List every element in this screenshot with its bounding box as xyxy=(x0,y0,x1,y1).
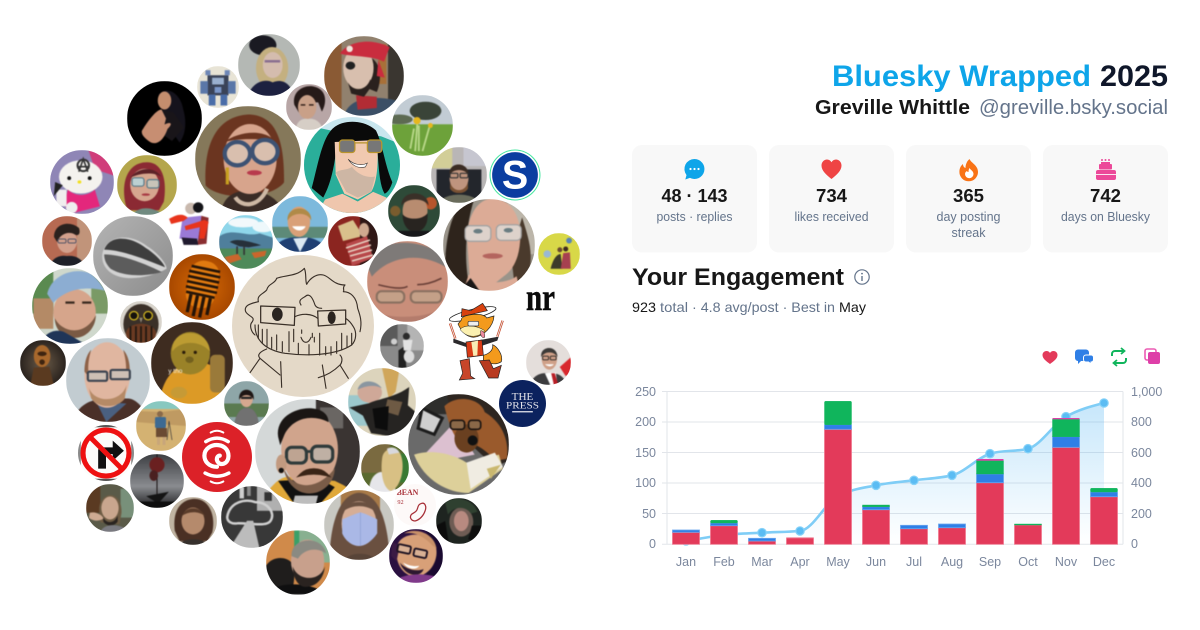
avatar: y tho baby painting: y tho xyxy=(168,368,183,375)
avatar: man on a train xyxy=(431,147,487,203)
avatar: The Press logo xyxy=(499,380,546,427)
profile name and handle xyxy=(815,97,1168,119)
avatar: woman wearing blue face mask xyxy=(324,490,394,560)
panel: avatar bubble cluster xyxy=(20,34,580,595)
left axis labels: 250 xyxy=(635,385,656,399)
panel: days on Bluesky stat: days on Bluesky xyxy=(1061,209,1150,224)
left axis labels xyxy=(635,385,656,551)
avatar: no right turn sign xyxy=(78,425,134,481)
engagement summary: · 4.8 avg/post · Best in xyxy=(692,299,835,315)
panel: likes received stat: 734 xyxy=(816,186,847,206)
profile name and handle: @greville.bsky.social xyxy=(979,97,1168,119)
avatar: cowboy fox cartoon xyxy=(445,300,509,382)
avatar: dog wearing glasses with a book xyxy=(408,394,509,495)
avatar: main man with glasses and moustache xyxy=(255,399,360,504)
icon: replies xyxy=(1075,350,1094,364)
avatar: bearded man, painted backdrop xyxy=(388,185,440,237)
avatar: grey-haired man looking down xyxy=(367,241,448,322)
avatar: glittery face in dark xyxy=(436,498,482,544)
right axis labels: 800 xyxy=(1131,415,1152,429)
title: 2025 xyxy=(1100,60,1168,93)
left axis labels: 150 xyxy=(635,446,656,460)
month labels: Nov xyxy=(1055,555,1078,569)
avatar: black and white seed xyxy=(93,216,173,296)
avatar: blonde woman from behind xyxy=(361,444,409,492)
icon: reposts xyxy=(1112,348,1126,366)
right axis labels: 1,000 xyxy=(1131,385,1162,399)
panel: likes received stat: likes received xyxy=(794,209,868,224)
avatar: purple-tinted man with glasses xyxy=(389,529,443,583)
title: Bluesky Wrapped xyxy=(832,60,1091,93)
icon: info xyxy=(855,270,869,284)
engagement summary: total xyxy=(660,299,688,315)
avatar: Bean 92 logo: BEAN xyxy=(397,488,418,497)
avatar: man with beard, bottom of cluster xyxy=(266,530,330,595)
avatar: robot illustration xyxy=(197,66,239,108)
avatar: smiling woman in glasses xyxy=(443,199,535,291)
left axis labels: 0 xyxy=(649,537,656,551)
icon: heart xyxy=(822,160,842,179)
icon: cake xyxy=(1096,159,1116,180)
panel: day posting streak stat xyxy=(906,145,1031,252)
avatar: woman with dark curled hair xyxy=(169,497,217,545)
avatar: kilted hiker in field xyxy=(136,401,186,451)
engagement summary: 923 xyxy=(632,299,656,315)
panel: day posting streak stat: streak xyxy=(952,225,986,240)
avatar: Bean 92 logo xyxy=(394,484,436,526)
avatar: cartoon Kronk with sunglasses xyxy=(304,117,400,213)
left axis labels: 100 xyxy=(635,476,656,490)
month labels: Aug xyxy=(941,555,963,569)
avatar: woman with round blue glasses xyxy=(195,106,301,212)
avatar: owl xyxy=(120,301,162,343)
month labels: Jun xyxy=(866,555,886,569)
engagement summary xyxy=(632,299,866,315)
right axis labels: 600 xyxy=(1131,446,1152,460)
avatar: hello kitty plush xyxy=(50,150,114,214)
avatar: yellow illustrated badge xyxy=(538,233,580,275)
avatar: pirate with red bandana xyxy=(324,36,404,116)
avatar: hand-drawn sketch with glasses xyxy=(232,255,374,397)
avatar: black and white abstract illustration xyxy=(221,486,283,548)
avatar: bald man with glasses xyxy=(66,338,150,422)
avatar: man in red-striped tie xyxy=(526,340,571,385)
cumulative points xyxy=(682,399,1108,545)
icon: quotes xyxy=(1145,349,1160,364)
avatar: bird over mountain landscape xyxy=(219,215,273,269)
profile name and handle: Greville Whittle xyxy=(815,97,970,119)
avatar: dark tree photo xyxy=(130,454,184,508)
right axis labels: 0 xyxy=(1131,537,1138,551)
heading: Your Engagement: Your Engagement xyxy=(632,264,844,291)
avatar: daffodils in field xyxy=(392,95,453,156)
panel: posts and replies stat xyxy=(632,145,757,252)
avatar: hug illustration xyxy=(168,202,210,246)
avatar: orange microphone xyxy=(169,254,235,320)
avatar: illustrated woman on black xyxy=(127,81,202,156)
chart: monthly engagement stacked bars with cumulative line xyxy=(635,385,1162,569)
month labels: Oct xyxy=(1018,555,1038,569)
icon: flame xyxy=(959,159,978,181)
right axis labels: 200 xyxy=(1131,507,1152,521)
panel: posts and replies stat: 48 · 143 xyxy=(662,186,728,206)
month labels: Jan xyxy=(676,555,696,569)
panel: likes received stat xyxy=(769,145,894,252)
panel: days on Bluesky stat xyxy=(1043,145,1168,252)
avatar: man in blue suit xyxy=(272,196,328,252)
avatar: woman with dark cat xyxy=(348,368,416,436)
avatar: woman in checked dress xyxy=(224,381,269,426)
month labels xyxy=(676,555,1115,569)
month labels: Feb xyxy=(713,555,735,569)
left axis labels: 50 xyxy=(642,507,656,521)
avatar: blue S logo xyxy=(489,149,541,201)
icon: speech bubble xyxy=(684,159,704,180)
month labels: Apr xyxy=(790,555,810,569)
month labels: Jul xyxy=(906,555,922,569)
month labels: May xyxy=(826,555,851,569)
avatar: y tho baby painting xyxy=(151,322,233,404)
month labels: Sep xyxy=(979,555,1001,569)
avatar: woman with red hair and glasses xyxy=(117,155,177,215)
avatar: red and striped vintage photo xyxy=(328,216,378,266)
avatar: red spiral logo xyxy=(182,422,252,492)
cumulative line xyxy=(686,403,1104,541)
avatar: black and white group photo xyxy=(380,324,424,368)
avatar: woman with veil xyxy=(238,34,300,96)
month labels: Dec xyxy=(1093,555,1115,569)
icon: like xyxy=(1042,351,1058,364)
panel: days on Bluesky stat: 742 xyxy=(1090,186,1121,206)
avatar: man with long hair, hand on cheek xyxy=(86,484,134,532)
right axis labels: 400 xyxy=(1131,476,1152,490)
avatar: The Press logo: THE xyxy=(512,392,533,403)
avatar: Bean 92 logo: 92 xyxy=(397,499,404,506)
right axis labels xyxy=(1131,385,1162,551)
avatar: blue S logo: S xyxy=(502,154,528,198)
cumulative area xyxy=(686,403,1104,544)
avatar: man with blue cap xyxy=(32,268,108,344)
engagement summary: May xyxy=(839,299,866,315)
stacked bars xyxy=(672,401,1118,544)
left axis labels: 200 xyxy=(635,415,656,429)
avatar: classical portrait with curly hair xyxy=(286,84,332,130)
panel: day posting streak stat: day posting xyxy=(936,209,1000,224)
panel: posts and replies stat: posts · replies xyxy=(656,209,733,224)
avatar: Chewbacca portrait xyxy=(20,340,66,386)
avatar: The Press logo: PRESS xyxy=(506,401,539,412)
avatar: person against brick wall xyxy=(42,216,92,266)
chart legend icons xyxy=(1042,348,1160,366)
month labels: Mar xyxy=(751,555,773,569)
panel: day posting streak stat: 365 xyxy=(953,186,984,206)
